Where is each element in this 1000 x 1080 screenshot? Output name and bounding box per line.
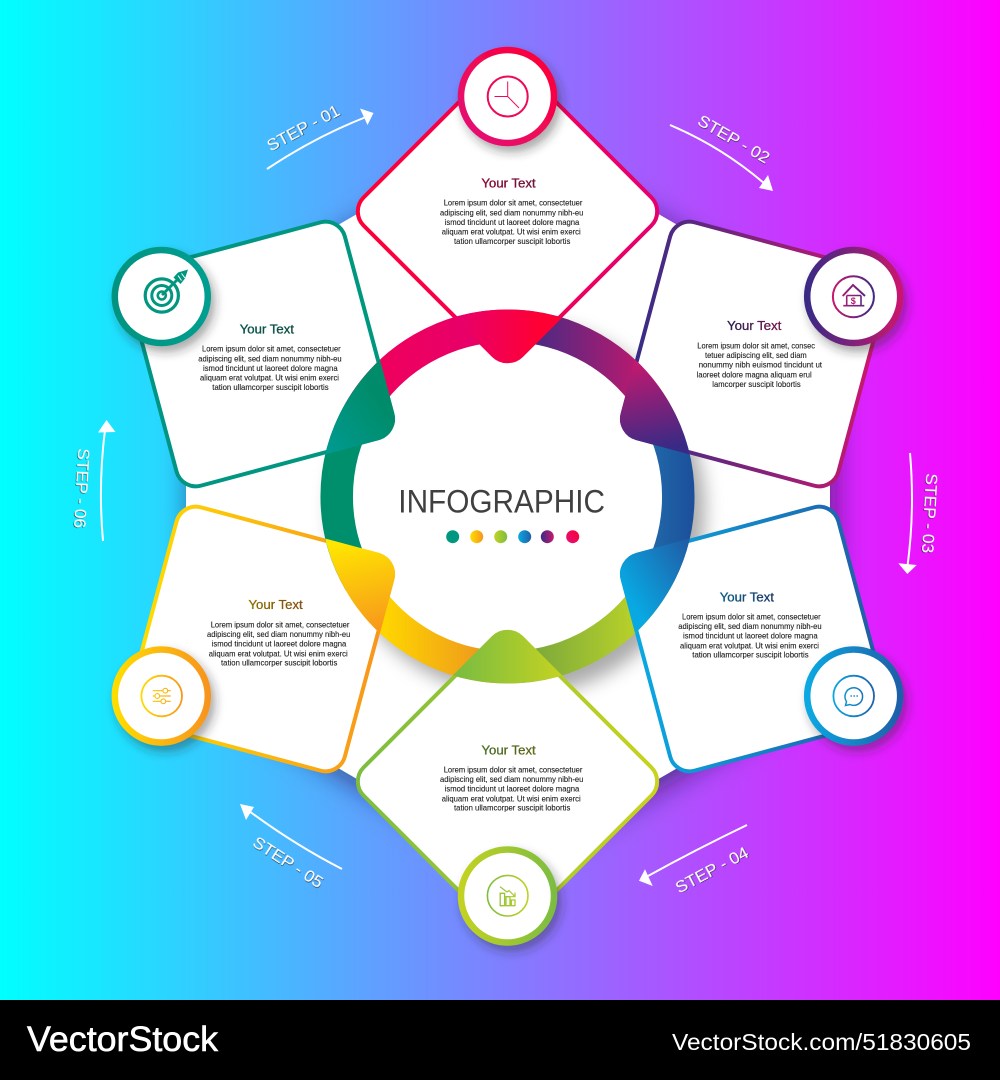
footer logo: VectorStock — [27, 1020, 219, 1059]
heading: Your Text — [720, 589, 775, 604]
label: step 05: STEP - 05 — [249, 833, 327, 892]
body text: ismod tincidunt ut laoreet dolore magna — [445, 217, 580, 227]
card outline — [124, 217, 398, 491]
panel: step 03 card — [617, 502, 900, 776]
panel: step 02 card — [617, 217, 900, 491]
card outline — [617, 217, 891, 491]
body text: Lorem ipsum dolor sit amet, consectetuer — [211, 619, 350, 629]
icon: target with arrow — [145, 270, 188, 312]
body text: ismod tincidunt ut laoreet dolore magna — [212, 639, 347, 649]
heading: Your Text — [240, 322, 294, 337]
body text: Lorem ipsum dolor sit amet, consectetuer — [202, 344, 341, 354]
heading: Your Text — [249, 597, 303, 612]
icon badge — [461, 50, 554, 143]
heading: Your Text — [482, 742, 536, 757]
body text: adipiscing elit, sed diam nonummy nibh-eu — [207, 629, 351, 639]
body text — [440, 198, 584, 246]
body text: tation ullamcorper suscipit lobortis — [454, 236, 570, 246]
label: step 02: STEP - 02 — [694, 111, 773, 167]
center ring — [320, 310, 695, 684]
body text: nonummy nibh euismod tincidunt ut — [699, 360, 823, 370]
panel: step 01 card — [350, 50, 665, 369]
body text: adipiscing elit, sed diam nonummy nibh-eu — [198, 353, 342, 363]
ring shadow — [331, 322, 705, 696]
body text: tation ullamcorper suscipit lobortis — [692, 650, 809, 660]
icon badge — [807, 250, 900, 343]
body text: Lorem ipsum dolor sit amet, consectetuer — [682, 611, 821, 621]
body text: laoreet dolore magna aliquam erul — [697, 369, 812, 379]
icon badge — [807, 650, 900, 742]
body text — [440, 764, 584, 813]
heading: Your Text — [248, 597, 303, 612]
icon: falling bar chart — [487, 875, 528, 916]
card outline — [617, 502, 891, 776]
heading: Your Text — [481, 742, 536, 757]
icon badge — [461, 850, 554, 942]
body text: aliquam erat volutpat. Ut wisi enim exerci — [442, 227, 581, 237]
body text: lamcorper suscipit lobortis — [712, 379, 801, 389]
body text: tation ullamcorper suscipit lobortis — [221, 658, 337, 668]
footer url: VectorStock.com/51830605 — [672, 1029, 971, 1055]
body text: aliquam erat volutpat. Ut wisi enim exerci — [200, 373, 339, 383]
body text: aliquam erat volutpat. Ut wisi enim exerci — [680, 640, 819, 650]
body text — [697, 340, 823, 389]
body text: adipiscing elit, sed diam nonummy nibh-eu — [440, 207, 584, 217]
label: step 01: STEP - 01 — [264, 101, 343, 155]
icon: house: $ — [851, 296, 856, 306]
body text: aliquam erat volutpat. Ut wisi enim exerci — [209, 648, 348, 658]
ring segments — [337, 326, 678, 667]
heading: Your Text — [240, 322, 295, 337]
body text — [207, 619, 351, 668]
body text: aliquam erat volutpat. Ut wisi enim exerci — [442, 793, 581, 803]
heading: Your Text — [727, 318, 782, 333]
body text: ismod tincidunt ut laoreet dolore magna — [445, 784, 580, 794]
colour dots — [446, 530, 579, 543]
icon badge — [115, 650, 208, 742]
label: step 06: STEP - 06 — [70, 448, 93, 529]
body text: adipiscing elit, sed diam nonummy nibh-eu — [678, 621, 822, 631]
body text: ismod tincidunt ut laoreet dolore magna — [683, 631, 818, 641]
body text: Lorem ipsum dolor sit amet, consec — [697, 340, 815, 350]
arrow: step 05 — [240, 804, 342, 869]
heading: Your Text — [727, 318, 782, 333]
body text: Lorem ipsum dolor sit amet, consectetuer — [444, 198, 583, 208]
panel: step 04 card — [350, 624, 665, 942]
white hexagon backdrop — [186, 127, 830, 866]
body text: adipiscing elit, sed diam nonummy nibh-eu — [440, 774, 584, 784]
body text: tation ullamcorper suscipit lobortis — [212, 382, 329, 392]
icon badge — [115, 250, 208, 343]
arrow: step 01 — [267, 108, 374, 169]
icon: house — [833, 276, 874, 317]
footer band — [0, 1000, 1000, 1080]
body text: tetuer adipiscing elit, sed diam — [705, 350, 807, 360]
icon: sliders — [141, 676, 182, 716]
panel: step 05 card — [115, 502, 398, 776]
heading: Your Text — [482, 176, 536, 191]
card tips overlapping ring — [273, 123, 690, 684]
body text — [678, 611, 822, 660]
heading: Your Text — [720, 589, 774, 604]
body text: tation ullamcorper suscipit lobortis — [454, 803, 570, 813]
label: step 03: STEP - 03 — [918, 473, 941, 554]
arrow: step 02 — [670, 125, 773, 191]
heading: Your Text — [481, 176, 536, 191]
arrow: step 06 — [98, 420, 116, 541]
label: step 04: STEP - 04 — [672, 843, 752, 897]
body text — [198, 344, 342, 392]
card outline — [350, 54, 665, 369]
card outline — [124, 502, 398, 776]
icon: chat bubble — [833, 676, 874, 716]
arrow: step 03 — [898, 453, 917, 574]
ring inner white — [350, 338, 666, 654]
icon: clock — [488, 76, 528, 116]
panel: step 06 card — [115, 217, 398, 491]
arrow: step 04 — [639, 825, 747, 886]
body text: Lorem ipsum dolor sit amet, consectetuer — [444, 764, 583, 774]
body text: ismod tincidunt ut laoreet dolore magna — [203, 363, 338, 373]
card outline — [350, 624, 665, 939]
title: INFOGRAPHIC — [398, 484, 605, 520]
